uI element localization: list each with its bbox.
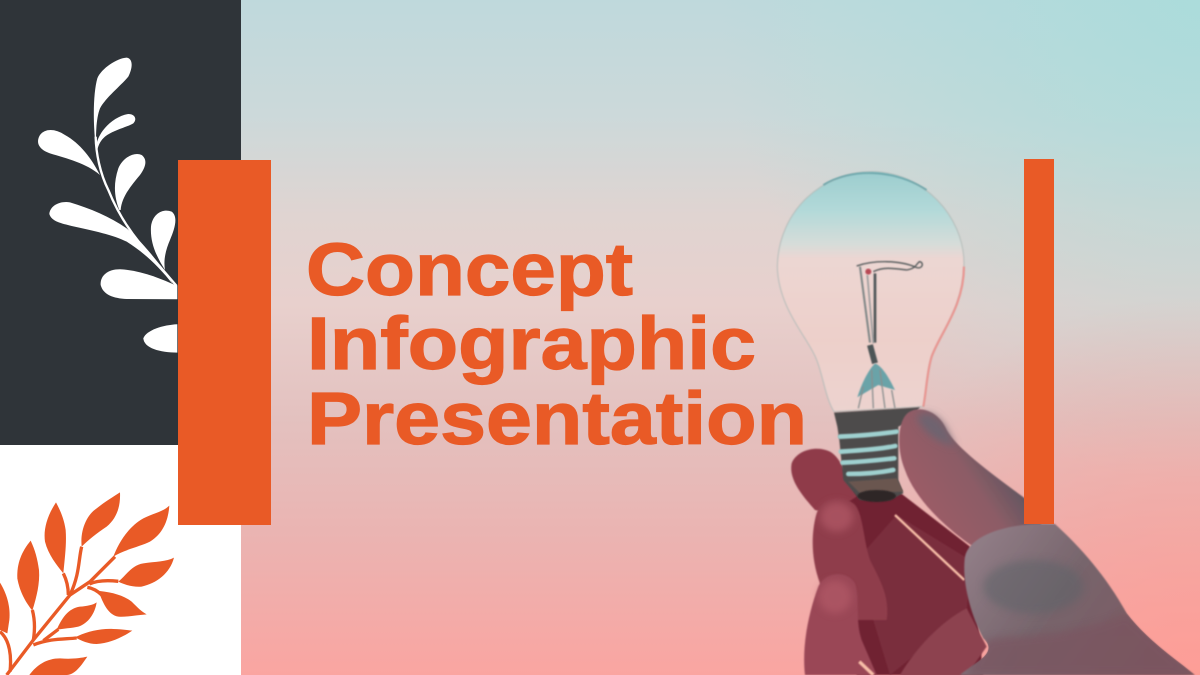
photo: hand holding light bulb [777,172,1195,675]
dark panel top left [0,0,241,445]
screw base [834,407,920,500]
orange rectangle left [178,160,271,525]
icon: white leaf branch [38,58,177,353]
background photo: gradient sky [241,0,1200,675]
white panel bottom left [0,445,241,675]
bulb glass [777,172,964,412]
orange bar right [1024,159,1054,524]
icon: orange leaf branch [0,492,174,675]
title: Infographic [307,302,756,385]
title: Concept [306,228,633,311]
title: Presentation [307,377,807,460]
hand: thumb and back of hand [899,409,1195,675]
hand: palm shadow and fingers behind the bulb [791,449,987,675]
title [306,228,807,460]
light bulb [777,172,964,502]
filament and supports [857,262,922,363]
